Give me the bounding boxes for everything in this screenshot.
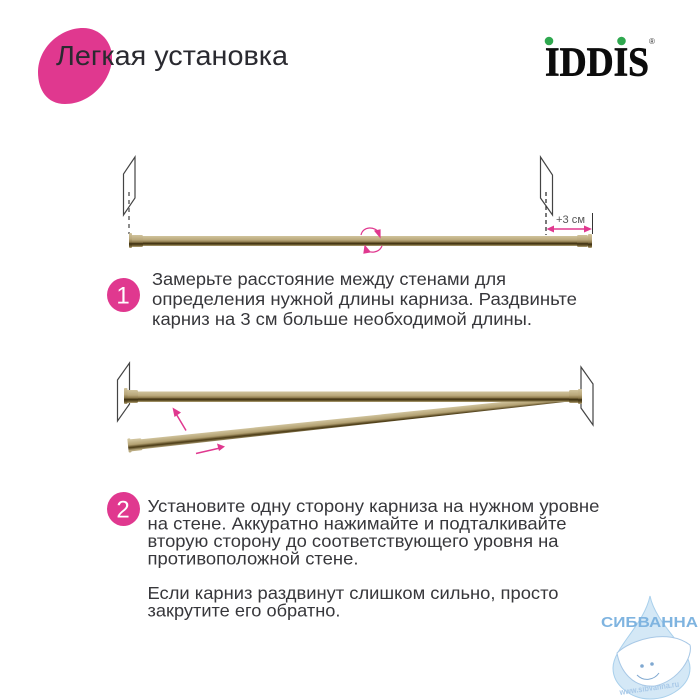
step 2 text: вторую сторону до соответствующего уровня на bbox=[148, 531, 559, 551]
rod bbox=[129, 233, 592, 248]
step 2 text: закрутите его обратно. bbox=[148, 600, 340, 620]
diagram 2: rod installation bbox=[118, 363, 593, 454]
arrow up-left bbox=[172, 408, 186, 430]
step 1 number badge bbox=[107, 278, 140, 312]
step 2 text: противоположной стене. bbox=[148, 548, 358, 568]
step 2 text: на стене. Аккуратно нажимайте и подталкивайте bbox=[148, 514, 566, 534]
step 2 number badge: 2 bbox=[116, 496, 130, 524]
step 2 text bbox=[148, 496, 600, 620]
watermark: Sibvanna logo: СИБВАННА bbox=[601, 615, 699, 631]
step 1 text: определения нужной длины карниза. Раздвиньте bbox=[152, 289, 577, 309]
title: Легкая установка bbox=[56, 40, 289, 71]
plus 3 cm dimension: +3 см bbox=[556, 214, 585, 226]
right limit line bbox=[592, 213, 594, 234]
watermark: Sibvanna logo bbox=[601, 596, 699, 699]
right wall outline bbox=[581, 367, 593, 425]
plus 3 cm dimension bbox=[546, 214, 592, 232]
pink blob behind title bbox=[38, 28, 112, 104]
step 1 number badge: 1 bbox=[116, 282, 130, 310]
watermark: Sibvanna logo: www.sibvanna.ru bbox=[618, 679, 680, 697]
step 2 text: Если карниз раздвинут слишком сильно, просто bbox=[148, 583, 558, 603]
step 2 text: Установите одну сторону карниза на нужном уровне bbox=[148, 496, 600, 516]
left wall outline bbox=[118, 363, 130, 421]
right wall outline bbox=[540, 157, 552, 215]
level rod bbox=[124, 388, 582, 404]
logo: IDDIS: IDDIS bbox=[545, 38, 649, 84]
rotation arrows bbox=[361, 228, 382, 253]
angled rod bbox=[127, 393, 567, 453]
left dashed guide bbox=[128, 192, 130, 234]
step 1 text: Замерьте расстояние между стенами для bbox=[152, 269, 506, 289]
logo: IDDIS: ® bbox=[649, 37, 655, 46]
diagram 1: rod measurement bbox=[124, 157, 592, 253]
left wall outline bbox=[124, 157, 135, 215]
step 1 text: карниз на 3 см больше необходимой длины. bbox=[152, 309, 532, 329]
right dashed guide bbox=[545, 192, 547, 235]
step 2 number badge bbox=[107, 492, 140, 526]
step 1 text bbox=[152, 269, 577, 329]
arrow right bbox=[196, 444, 225, 454]
